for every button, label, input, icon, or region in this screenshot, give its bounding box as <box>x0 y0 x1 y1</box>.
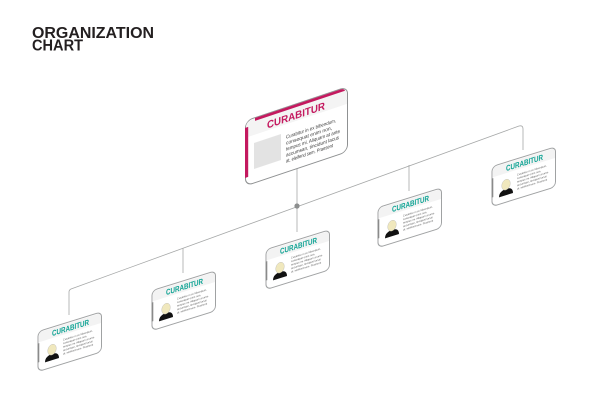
top accent <box>255 88 345 121</box>
card 4: at, eleifend sem. Praesent <box>403 218 433 232</box>
card 1: at, eleifend sem. Praesent <box>63 342 93 356</box>
card 3 <box>266 230 330 290</box>
card 2: at, eleifend sem. Praesent <box>177 301 207 315</box>
card 3: tempus mi. Aliquam at ante <box>291 253 323 267</box>
card 4 <box>378 188 442 248</box>
card 4: CURABITUR <box>392 194 429 214</box>
card 1: CURABITUR <box>52 318 89 338</box>
card 5: Curabitur in ex bibendum, <box>517 164 547 177</box>
image placeholder <box>254 134 281 169</box>
main card <box>245 87 348 186</box>
card 5: CURABITUR <box>506 153 543 173</box>
body text: consequat enim non, <box>286 125 332 147</box>
card 5 <box>492 147 556 207</box>
card 4: tempus mi. Aliquam at ante <box>403 211 435 225</box>
left accent <box>245 127 248 178</box>
body text: tempus mi. Aliquam at ante <box>286 129 340 153</box>
card 5: tempus mi. Aliquam at ante <box>517 170 549 184</box>
card 1: accumsan, tincidunt lacus <box>63 339 93 352</box>
card 1: consequat enim non, <box>63 334 87 345</box>
connector lines <box>69 126 523 315</box>
card 3: Curabitur in ex bibendum, <box>291 247 321 260</box>
card 3: accumsan, tincidunt lacus <box>291 257 321 270</box>
card 4: accumsan, tincidunt lacus <box>403 215 433 228</box>
card 2: consequat enim non, <box>177 293 201 304</box>
avatar <box>273 260 287 280</box>
card 2: accumsan, tincidunt lacus <box>177 298 207 311</box>
avatar <box>385 218 399 238</box>
card 4: consequat enim non, <box>403 210 427 221</box>
card 2: tempus mi. Aliquam at ante <box>177 294 209 308</box>
body text: at, eleifend sem. Praesent <box>286 143 333 165</box>
avatar <box>159 301 173 321</box>
header band <box>246 88 347 138</box>
card body <box>246 87 348 186</box>
card 2: CURABITUR <box>166 277 203 297</box>
card 5: consequat enim non, <box>517 169 541 180</box>
avatar <box>499 177 513 197</box>
card 5: accumsan, tincidunt lacus <box>517 174 547 187</box>
card 5: at, eleifend sem. Praesent <box>517 177 547 191</box>
body text: Curabitur in ex bibendum, <box>286 118 336 141</box>
card 1: tempus mi. Aliquam at ante <box>63 335 95 349</box>
card 3: at, eleifend sem. Praesent <box>291 260 321 274</box>
title: CHART <box>32 38 83 54</box>
card 3: CURABITUR <box>280 236 317 256</box>
title <box>32 25 154 54</box>
avatar <box>45 342 59 362</box>
body text: accumsan, tincidunt lacus <box>286 135 339 159</box>
title: ORGANIZATION <box>32 25 154 42</box>
body text <box>286 117 340 165</box>
card 3: consequat enim non, <box>291 252 315 263</box>
heading: CURABITUR <box>267 100 325 132</box>
card 4: Curabitur in ex bibendum, <box>403 205 433 218</box>
card 2: Curabitur in ex bibendum, <box>177 288 207 301</box>
card 1 <box>38 312 102 372</box>
card 1: Curabitur in ex bibendum, <box>63 329 93 342</box>
card 2 <box>152 271 216 331</box>
